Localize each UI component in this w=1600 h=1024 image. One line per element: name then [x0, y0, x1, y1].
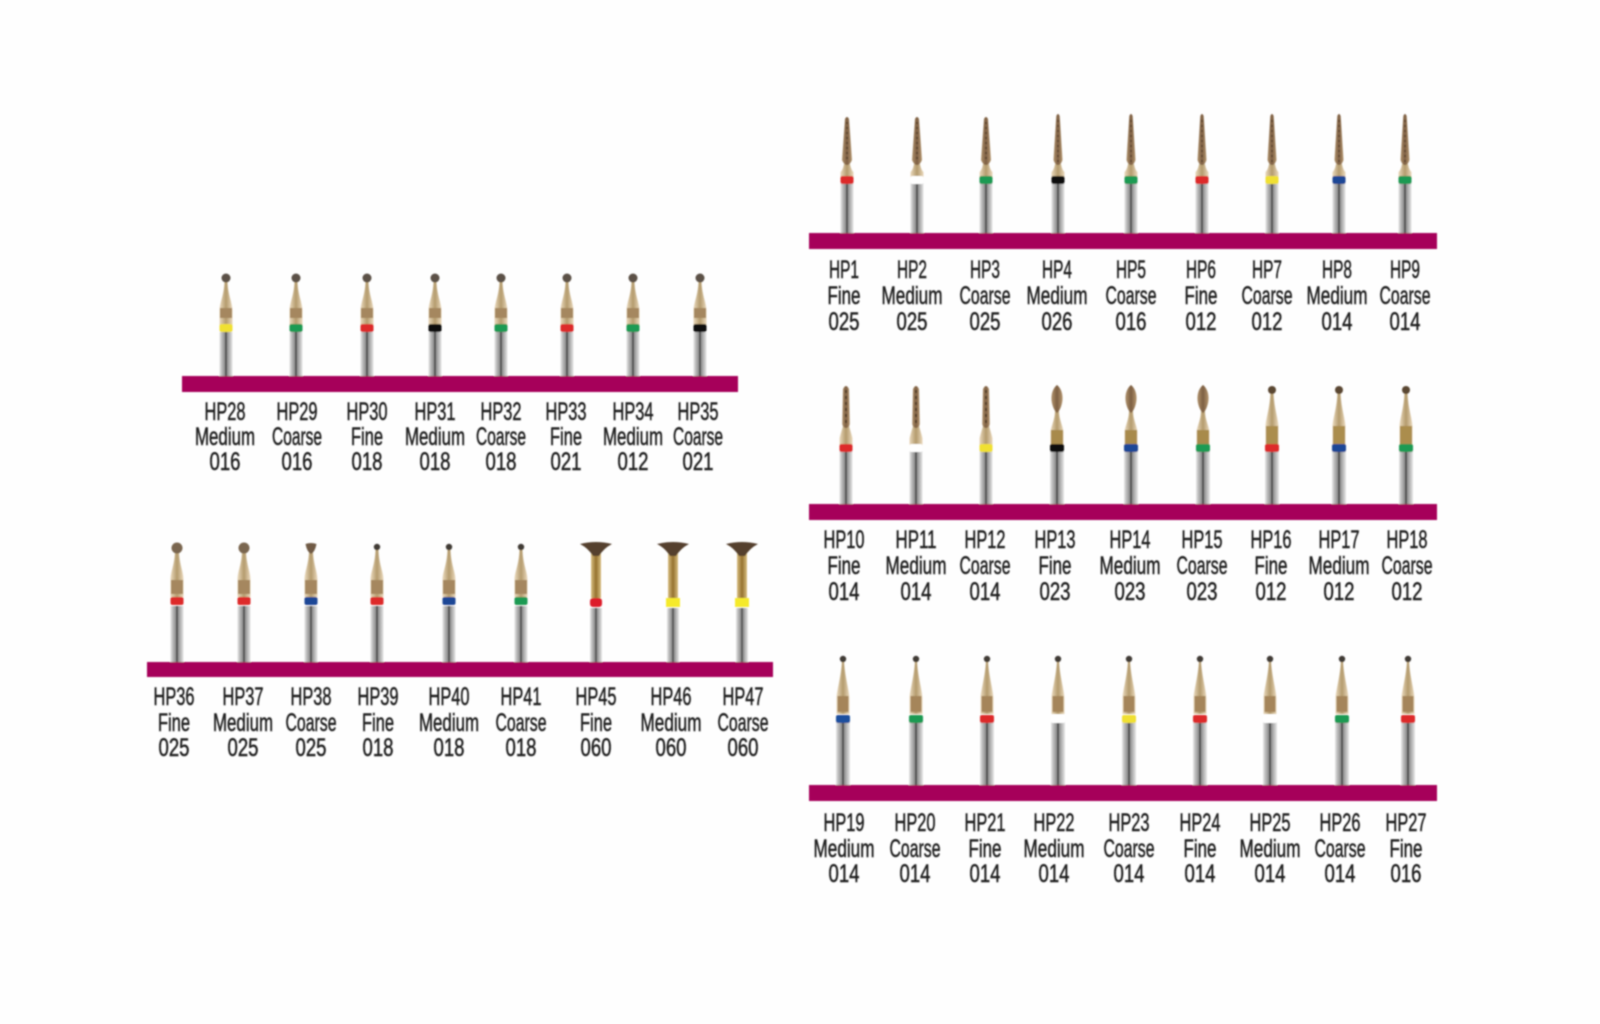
icon: bur HP9	[1398, 114, 1412, 233]
icon: bur HP40	[442, 544, 456, 662]
icon: bur HP38	[304, 543, 318, 662]
panel: HP19 to HP27 burs	[809, 656, 1437, 888]
label: HP8	[1306, 256, 1368, 336]
label: HP10: Fine	[828, 552, 860, 580]
label: HP30: HP30	[346, 398, 388, 426]
label: HP6	[1184, 256, 1218, 336]
icon: bur HP23	[1122, 656, 1136, 785]
label: HP38: HP38	[290, 683, 332, 711]
label: HP9	[1380, 256, 1430, 336]
label: HP38: Coarse	[285, 709, 337, 737]
label: HP40: 018	[434, 734, 464, 762]
label: HP23: 014	[1114, 860, 1145, 888]
shelf bar	[182, 376, 738, 392]
label: HP38	[286, 683, 336, 762]
label: HP39: HP39	[358, 683, 398, 711]
icon: bur HP7	[1266, 114, 1278, 233]
label: HP21: Fine	[968, 835, 1002, 863]
label: HP12: 014	[970, 578, 1001, 606]
label: HP18	[1382, 526, 1432, 606]
label: HP27: 016	[1390, 860, 1422, 888]
icon: bur HP28	[220, 274, 232, 376]
label: HP35: 021	[682, 448, 714, 476]
label: HP13: 023	[1040, 578, 1070, 606]
label: HP11	[886, 526, 946, 606]
label: HP3	[960, 256, 1010, 336]
label: HP26: HP26	[1320, 809, 1360, 837]
label: HP3: HP3	[970, 256, 1000, 284]
label: HP25: HP25	[1250, 809, 1290, 837]
label: HP35: HP35	[678, 398, 718, 426]
label: HP47: Coarse	[717, 709, 769, 737]
icon: bur HP26	[1335, 656, 1349, 785]
label: HP21: HP21	[964, 809, 1006, 837]
label: HP29: HP29	[276, 398, 318, 426]
icon: bur HP14	[1124, 385, 1138, 504]
label: HP22: 014	[1038, 860, 1070, 888]
label: HP41: Coarse	[495, 709, 547, 737]
label: HP23: HP23	[1108, 809, 1150, 837]
label: HP5: HP5	[1116, 256, 1146, 284]
label: HP12: HP12	[964, 526, 1006, 554]
label: HP28: HP28	[204, 398, 246, 426]
label: HP30: Fine	[351, 423, 383, 451]
label: HP41: 018	[506, 734, 536, 762]
label: HP21	[964, 809, 1006, 888]
label: HP39: 018	[362, 734, 394, 762]
label: HP18: HP18	[1386, 526, 1428, 554]
label: HP9: 014	[1390, 308, 1421, 336]
icon: bur HP33	[560, 274, 574, 376]
label: HP6: HP6	[1186, 256, 1216, 284]
label: HP34: Medium	[603, 423, 663, 451]
label: HP37: 025	[228, 734, 258, 762]
icon: bur HP2	[910, 117, 924, 233]
label: HP4: HP4	[1042, 256, 1072, 284]
label: HP39	[358, 683, 398, 762]
label: HP2: 025	[896, 308, 928, 336]
icon: bur HP45	[580, 542, 612, 662]
label: HP36: HP36	[154, 683, 194, 711]
icon: bur HP1	[840, 117, 854, 233]
icon: bur HP11	[910, 386, 922, 504]
icon: bur HP8	[1332, 114, 1346, 233]
label: HP6: 012	[1186, 308, 1216, 336]
label: HP37: HP37	[222, 683, 264, 711]
label: HP27: HP27	[1386, 809, 1426, 837]
label: HP26: 014	[1324, 860, 1356, 888]
label: HP1: HP1	[829, 256, 859, 284]
label: HP17: 012	[1324, 578, 1354, 606]
label: HP13: HP13	[1034, 526, 1076, 554]
icon: bur HP36	[170, 542, 184, 662]
label: HP8: Medium	[1306, 282, 1368, 310]
label: HP5	[1106, 256, 1156, 336]
panel: HP36 to HP47 burs	[147, 542, 773, 762]
label: HP1: 025	[828, 308, 860, 336]
label: HP5: Coarse	[1105, 282, 1157, 310]
label: HP12	[960, 526, 1010, 606]
label: HP19: Medium	[813, 835, 875, 863]
icon: bur HP34	[626, 274, 640, 376]
label: HP27: Fine	[1390, 835, 1422, 863]
label: HP34: 012	[618, 448, 648, 476]
label: HP17	[1308, 526, 1370, 606]
label: HP18: Coarse	[1381, 552, 1433, 580]
label: HP40: HP40	[428, 683, 470, 711]
label: HP47: 060	[728, 734, 758, 762]
icon: bur HP18	[1399, 386, 1413, 504]
label: HP7: 012	[1252, 308, 1282, 336]
label: HP16: Fine	[1254, 552, 1288, 580]
label: HP19: 014	[828, 860, 860, 888]
panel: HP1 to HP9 flame burs	[809, 114, 1437, 336]
label: HP40	[419, 683, 479, 762]
label: HP28: 016	[210, 448, 240, 476]
label: HP41: HP41	[500, 683, 542, 711]
label: HP8: HP8	[1322, 256, 1352, 284]
label: HP22: Medium	[1023, 835, 1085, 863]
shelf bar	[809, 504, 1437, 520]
label: HP2: Medium	[881, 282, 943, 310]
label: HP35: Coarse	[673, 423, 723, 451]
label: HP25	[1240, 809, 1300, 888]
icon: bur HP17	[1332, 386, 1346, 504]
label: HP46: 060	[656, 734, 686, 762]
label: HP21: 014	[970, 860, 1001, 888]
label: HP29: 016	[282, 448, 312, 476]
icon: bur HP21	[980, 656, 994, 785]
icon: bur HP20	[909, 656, 923, 785]
label: HP15	[1176, 526, 1228, 606]
icon: bur HP6	[1196, 114, 1208, 233]
label: HP26	[1314, 809, 1366, 888]
label: HP20: Coarse	[889, 835, 941, 863]
label: HP14	[1100, 526, 1160, 606]
icon: bur HP47	[726, 542, 758, 662]
label: HP19: HP19	[824, 809, 864, 837]
label: HP46: Medium	[640, 709, 702, 737]
label: HP40: Medium	[419, 709, 479, 737]
label: HP20: HP20	[894, 809, 936, 837]
label: HP2: HP2	[897, 256, 927, 284]
label: HP31: 018	[420, 448, 450, 476]
label: HP31	[405, 398, 465, 476]
label: HP31: Medium	[405, 423, 465, 451]
label: HP46: HP46	[650, 683, 692, 711]
label: HP34	[603, 398, 663, 476]
label: HP22: HP22	[1034, 809, 1074, 837]
label: HP13	[1034, 526, 1076, 606]
label: HP3: Coarse	[959, 282, 1011, 310]
label: HP15: 023	[1186, 578, 1218, 606]
label: HP29	[272, 398, 322, 476]
label: HP24	[1180, 809, 1221, 888]
shelf bar	[809, 785, 1437, 801]
label: HP46	[640, 683, 702, 762]
label: HP8: 014	[1322, 308, 1353, 336]
label: HP14: Medium	[1099, 552, 1161, 580]
label: HP47	[718, 683, 768, 762]
label: HP14: 023	[1114, 578, 1146, 606]
label: HP27	[1386, 809, 1426, 888]
label: HP37: Medium	[213, 709, 273, 737]
label: HP10: 014	[828, 578, 860, 606]
shelf bar	[147, 662, 773, 677]
label: HP20: 014	[900, 860, 931, 888]
icon: bur HP25	[1263, 656, 1277, 785]
shelf bar	[809, 233, 1437, 249]
icon: bur HP16	[1265, 386, 1279, 504]
label: HP32: 018	[486, 448, 516, 476]
label: HP32: Coarse	[476, 423, 526, 451]
label: HP22	[1024, 809, 1084, 888]
label: HP39: Fine	[362, 709, 394, 737]
icon: bur HP10	[840, 386, 852, 504]
label: HP33: Fine	[550, 423, 582, 451]
label: HP9: Coarse	[1379, 282, 1431, 310]
label: HP18: 012	[1392, 578, 1422, 606]
icon: bur HP22	[1051, 656, 1065, 785]
icon: bur HP35	[694, 274, 706, 376]
label: HP16	[1250, 526, 1292, 606]
panel: HP28 to HP35 ball burs	[182, 274, 738, 476]
label: HP45	[576, 683, 616, 762]
label: HP1: Fine	[828, 282, 860, 310]
label: HP23: Coarse	[1103, 835, 1155, 863]
icon: bur HP12	[980, 386, 992, 504]
label: HP2	[882, 256, 942, 336]
icon: bur HP15	[1196, 385, 1210, 504]
label: HP10: HP10	[824, 526, 864, 554]
label: HP19	[814, 809, 874, 888]
label: HP33: HP33	[546, 398, 586, 426]
label: HP4: Medium	[1026, 282, 1088, 310]
label: HP17: HP17	[1318, 526, 1360, 554]
label: HP7: HP7	[1252, 256, 1282, 284]
label: HP25: 014	[1254, 860, 1286, 888]
label: HP35	[673, 398, 723, 476]
label: HP23	[1104, 809, 1154, 888]
label: HP3: 025	[970, 308, 1000, 336]
label: HP14: HP14	[1110, 526, 1151, 554]
label: HP36	[154, 683, 194, 762]
icon: bur HP5	[1124, 114, 1138, 233]
label: HP13: Fine	[1038, 552, 1072, 580]
label: HP33	[546, 398, 586, 476]
label: HP33: 021	[550, 448, 582, 476]
label: HP30: 018	[352, 448, 382, 476]
label: HP36: Fine	[158, 709, 190, 737]
label: HP34: HP34	[612, 398, 654, 426]
label: HP24: HP24	[1180, 809, 1221, 837]
label: HP15: Coarse	[1176, 552, 1228, 580]
label: HP45: 060	[580, 734, 612, 762]
label: HP1	[828, 256, 860, 336]
label: HP16: 012	[1256, 578, 1286, 606]
icon: bur HP32	[494, 274, 508, 376]
label: HP10	[824, 526, 864, 606]
label: HP20	[890, 809, 940, 888]
label: HP41	[496, 683, 546, 762]
icon: bur HP3	[980, 117, 992, 233]
icon: bur HP13	[1050, 385, 1064, 504]
label: HP5: 016	[1116, 308, 1146, 336]
label: HP17: Medium	[1308, 552, 1370, 580]
icon: bur HP19	[836, 656, 850, 785]
label: HP45: Fine	[580, 709, 612, 737]
label: HP29: Coarse	[272, 423, 322, 451]
label: HP24: Fine	[1184, 835, 1216, 863]
label: HP7	[1242, 256, 1292, 336]
label: HP26: Coarse	[1314, 835, 1366, 863]
label: HP30	[346, 398, 388, 476]
icon: bur HP37	[238, 542, 250, 662]
label: HP47: HP47	[722, 683, 764, 711]
label: HP32	[476, 398, 526, 476]
label: HP9: HP9	[1390, 256, 1420, 284]
label: HP25: Medium	[1239, 835, 1301, 863]
label: HP36: 025	[158, 734, 190, 762]
label: HP32: HP32	[480, 398, 522, 426]
icon: bur HP27	[1401, 656, 1415, 785]
icon: bur HP29	[290, 274, 302, 376]
label: HP7: Coarse	[1241, 282, 1293, 310]
label: HP4	[1026, 256, 1088, 336]
label: HP38: 025	[296, 734, 326, 762]
icon: bur HP46	[657, 542, 689, 662]
icon: bur HP30	[360, 274, 374, 376]
label: HP37	[213, 683, 273, 762]
label: HP6: Fine	[1184, 282, 1218, 310]
icon: bur HP31	[428, 274, 442, 376]
label: HP45: HP45	[576, 683, 616, 711]
label: HP4: 026	[1042, 308, 1072, 336]
label: HP12: Coarse	[959, 552, 1011, 580]
label: HP24: 014	[1184, 860, 1216, 888]
label: HP15: HP15	[1182, 526, 1222, 554]
icon: bur HP41	[514, 544, 528, 662]
icon: bur HP24	[1193, 656, 1207, 785]
label: HP11: 014	[900, 578, 932, 606]
label: HP31: HP31	[414, 398, 456, 426]
label: HP28	[195, 398, 255, 476]
panel: HP10 to HP18 burs	[809, 385, 1437, 606]
label: HP11: HP11	[896, 526, 936, 554]
label: HP11: Medium	[885, 552, 947, 580]
icon: bur HP4	[1052, 114, 1064, 233]
label: HP28: Medium	[195, 423, 255, 451]
label: HP16: HP16	[1250, 526, 1292, 554]
icon: bur HP39	[370, 544, 384, 662]
